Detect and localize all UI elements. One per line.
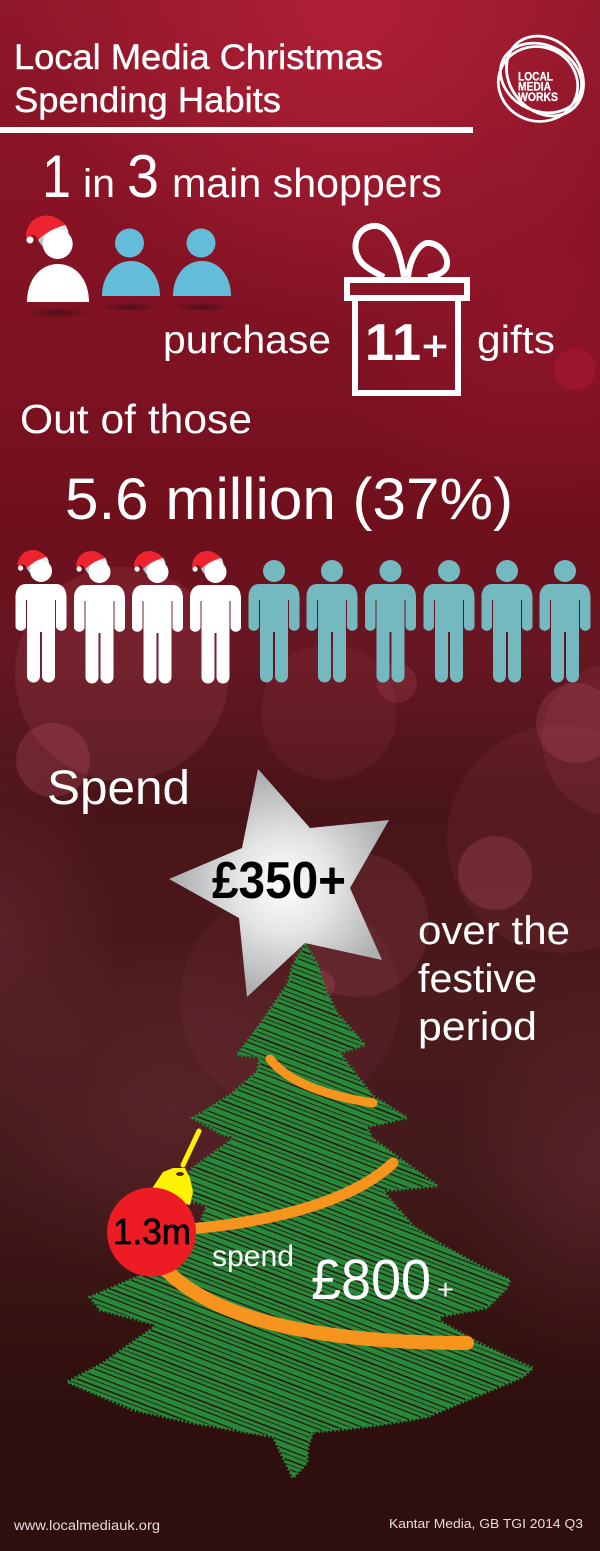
- title rule: [0, 127, 473, 133]
- heading: 1 in 3 main shoppers: [42, 143, 442, 210]
- heading: 1 in 3 main shoppers: 1: [42, 143, 71, 210]
- text: purchase: purchase: [163, 319, 331, 362]
- text: over the festive period: festive: [418, 957, 537, 1001]
- footer: website: www.localmediauk.org: [13, 1518, 160, 1533]
- figure 3 with hat: [132, 551, 183, 684]
- text: £350+: £350+: [212, 852, 346, 910]
- star: [169, 769, 389, 997]
- footer: source: Kantar Media, GB TGI 2014 Q3: [389, 1516, 583, 1531]
- text: £800+: +: [437, 1274, 454, 1305]
- figure 1 with hat: [16, 550, 66, 682]
- text: gifts: gifts: [477, 319, 555, 362]
- text: over the festive period: over the: [418, 909, 570, 953]
- icon: shopper blue 1: [100, 228, 160, 312]
- tree: [67, 944, 533, 1478]
- heading: 1 in 3 main shoppers: main shoppers: [172, 160, 442, 206]
- text: over the festive period: period: [418, 1005, 537, 1049]
- text: Spend: Spend: [47, 762, 190, 815]
- text: spend: spend: [212, 1240, 294, 1273]
- text: 11+: +: [422, 322, 448, 369]
- icon: gift box: [347, 226, 467, 393]
- text: Out of those: Out of those: [20, 396, 252, 442]
- figure 4 with hat: [190, 551, 241, 684]
- text: 5.6 million (37%): 5.6 million (37%): [65, 467, 513, 532]
- garlands: [168, 1059, 467, 1343]
- text: £800+: £800: [311, 1248, 431, 1312]
- logo: Local Media Works: WORKS: [518, 90, 558, 104]
- logo: Local Media Works: LOCAL: [518, 70, 553, 84]
- ornament: [107, 1131, 199, 1276]
- logo: Local Media Works: [488, 21, 599, 132]
- pictogram: 4 in 10 people: [16, 550, 590, 684]
- title: Local Media Christmas: [14, 38, 383, 77]
- text: 11+: 11: [365, 314, 421, 372]
- icon: shopper blue 2: [172, 228, 232, 312]
- heading: 1 in 3 main shoppers: in: [83, 162, 115, 206]
- title: Spending Habits: [14, 81, 281, 120]
- logo: Local Media Works: MEDIA: [518, 80, 551, 94]
- text: over the festive period: [418, 909, 570, 1049]
- figures 5 to 10: [248, 560, 590, 682]
- icon: shopper with Santa hat: [26, 215, 90, 319]
- text: 11+: [365, 314, 448, 372]
- heading: 1 in 3 main shoppers: 3: [127, 143, 159, 210]
- title: [14, 38, 383, 120]
- ornament: 1.3m: [113, 1211, 191, 1252]
- figure 2 with hat: [74, 551, 125, 684]
